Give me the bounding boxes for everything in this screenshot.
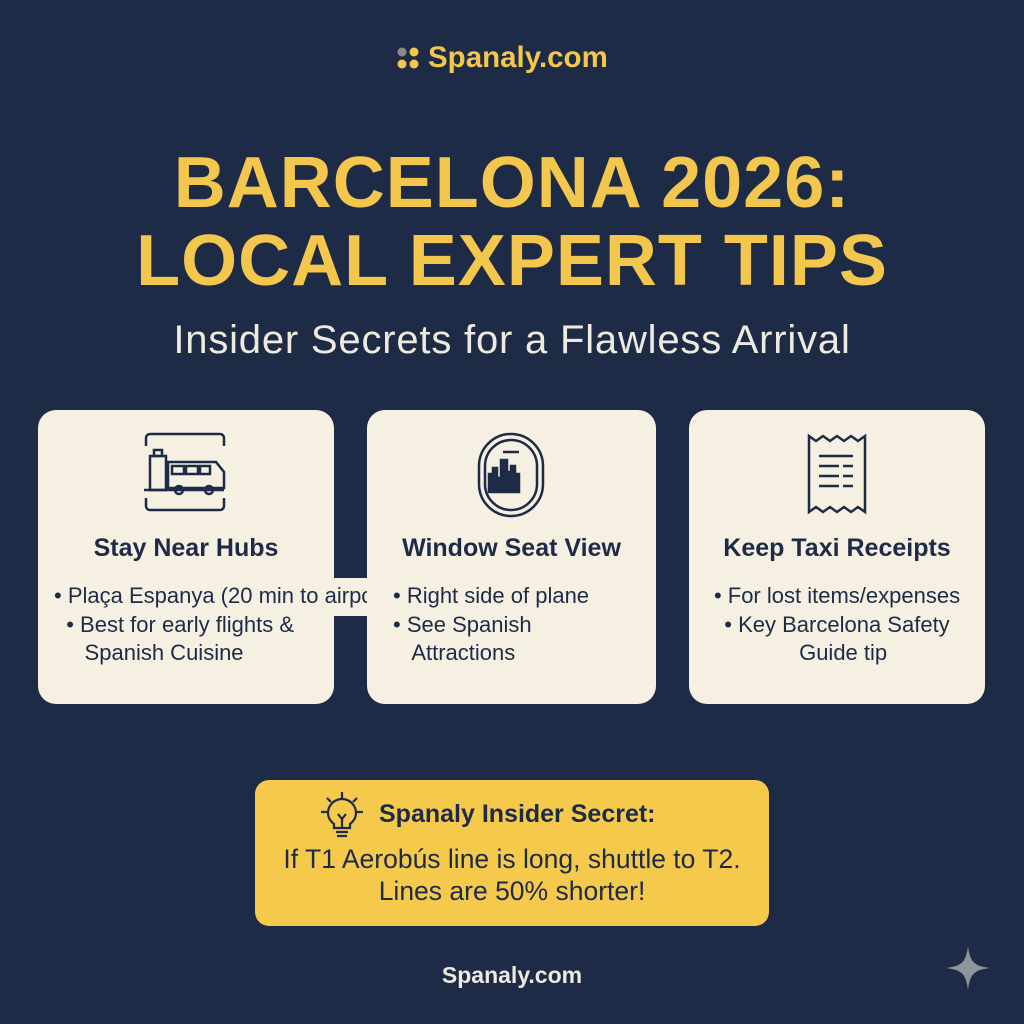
- bullets: • Best for early flights &: [66, 612, 294, 636]
- title: [136, 143, 888, 301]
- bullets: [714, 583, 960, 665]
- bullets: • For lost items/expenses: [714, 583, 960, 608]
- icon: lightbulb: [321, 792, 363, 838]
- icon: logo dots: [398, 48, 418, 68]
- bullets: Guide tip: [799, 640, 887, 665]
- bullets: • Key Barcelona Safety: [724, 612, 950, 636]
- heading: Stay Near Hubs: [94, 534, 278, 562]
- icon: airplane window: [478, 432, 544, 518]
- panel: keep taxi receipts: [689, 410, 985, 704]
- callout text: [283, 844, 741, 906]
- subtitle: Insider Secrets for a Flawless Arrival: [173, 318, 851, 362]
- bullets: • Plaça Espanya (20 min to airpo: [54, 583, 374, 608]
- footer: Spanaly.com: [442, 962, 582, 988]
- bullets: • Right side of plane: [393, 583, 589, 608]
- bullets: • See Spanish: [393, 612, 532, 636]
- bullets: [393, 583, 589, 665]
- icon: building and bus: [144, 432, 226, 512]
- callout: insider secret: [255, 780, 769, 926]
- panel: stay near hubs: [38, 410, 334, 704]
- bullets: [54, 583, 374, 665]
- bullets: Attractions: [411, 640, 515, 665]
- panel: window seat view: [367, 410, 656, 704]
- callout heading: Spanaly Insider Secret:: [379, 800, 656, 828]
- title: LOCAL EXPERT TIPS: [136, 221, 888, 301]
- bullets: Spanish Cuisine: [85, 640, 244, 665]
- bridge between cards: [330, 578, 372, 616]
- heading: Keep Taxi Receipts: [723, 534, 951, 562]
- callout text: Lines are 50% shorter!: [379, 876, 645, 906]
- icon: sparkle: [946, 946, 990, 990]
- title: BARCELONA 2026:: [174, 143, 850, 223]
- icon: receipt: [808, 434, 866, 514]
- callout text: If T1 Aerobús line is long, shuttle to T2.: [283, 844, 741, 874]
- logo top: Spanaly.com: [428, 41, 608, 74]
- heading: Window Seat View: [402, 534, 621, 562]
